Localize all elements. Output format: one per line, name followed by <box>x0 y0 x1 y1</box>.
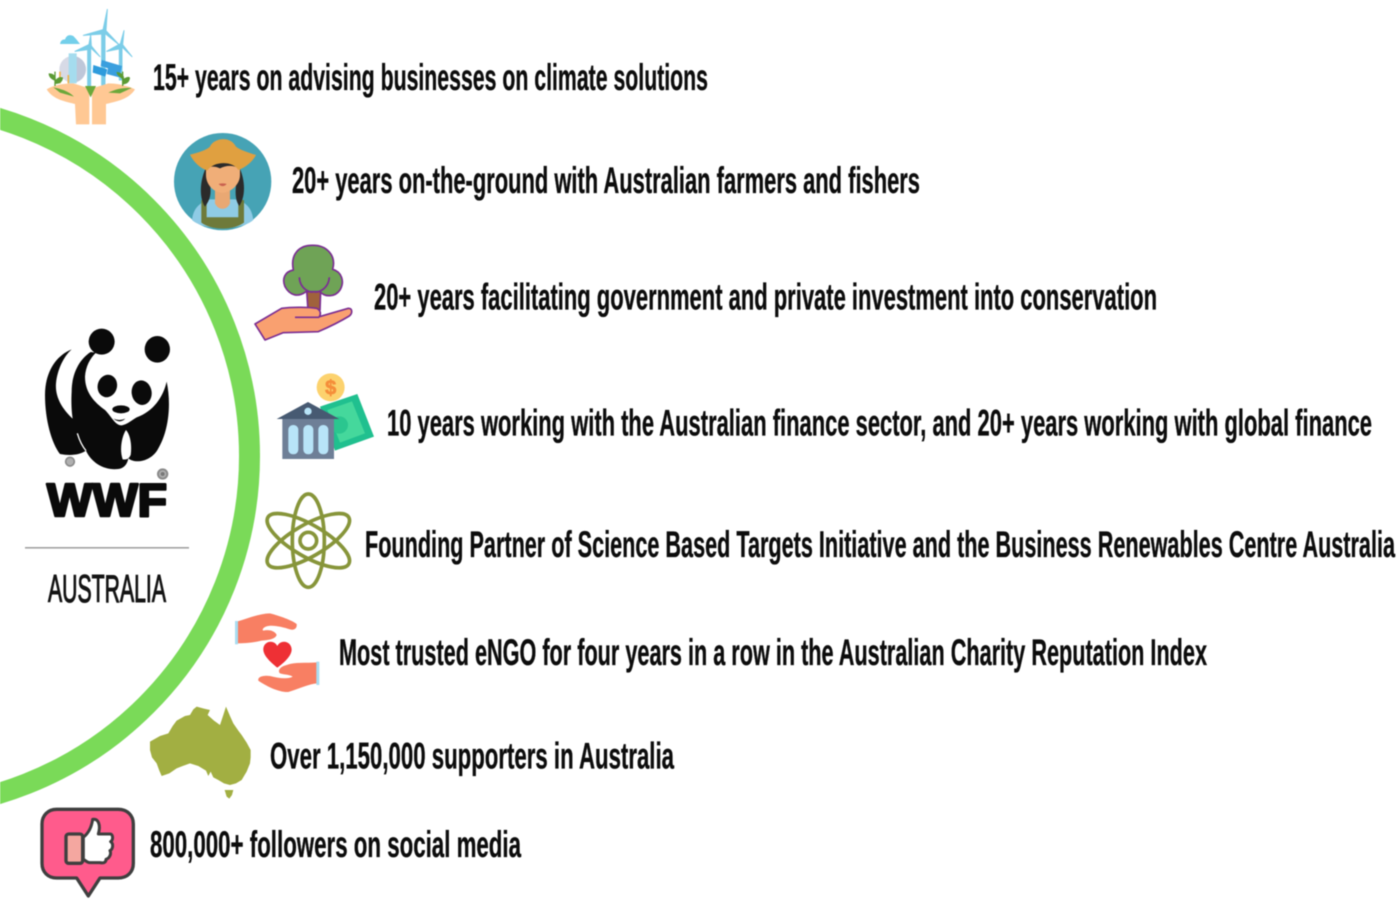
text: social media: 800,000+ followers on social media <box>150 824 521 865</box>
WWF wordmark: WWF <box>47 474 167 526</box>
icon: hand holding tree <box>255 245 352 340</box>
icon: farmer woman portrait <box>174 133 271 230</box>
icon: bank with money and coin <box>277 373 374 459</box>
Australia label: AUSTRALIA <box>48 568 166 611</box>
icon: hands around heart <box>235 613 319 692</box>
icon: wind and solar energy held in hands <box>47 9 135 124</box>
icon: atom <box>260 494 357 587</box>
icon: map of Australia <box>150 707 251 799</box>
text: farmers and fishers: 20+ years on-the-ground with Australian farmers and fishers <box>292 160 920 201</box>
panda <box>45 329 170 479</box>
green ring arc <box>0 104 250 808</box>
text: supporters: Over 1,150,000 supporters in Australia <box>270 736 674 776</box>
icon: thumbs up speech bubble <box>42 809 133 896</box>
text: climate solutions: 15+ years on advising businesses on climate solutions <box>153 57 708 98</box>
WWF Australia logo <box>25 329 189 611</box>
icon: bank with money and coin: $ <box>325 377 336 399</box>
